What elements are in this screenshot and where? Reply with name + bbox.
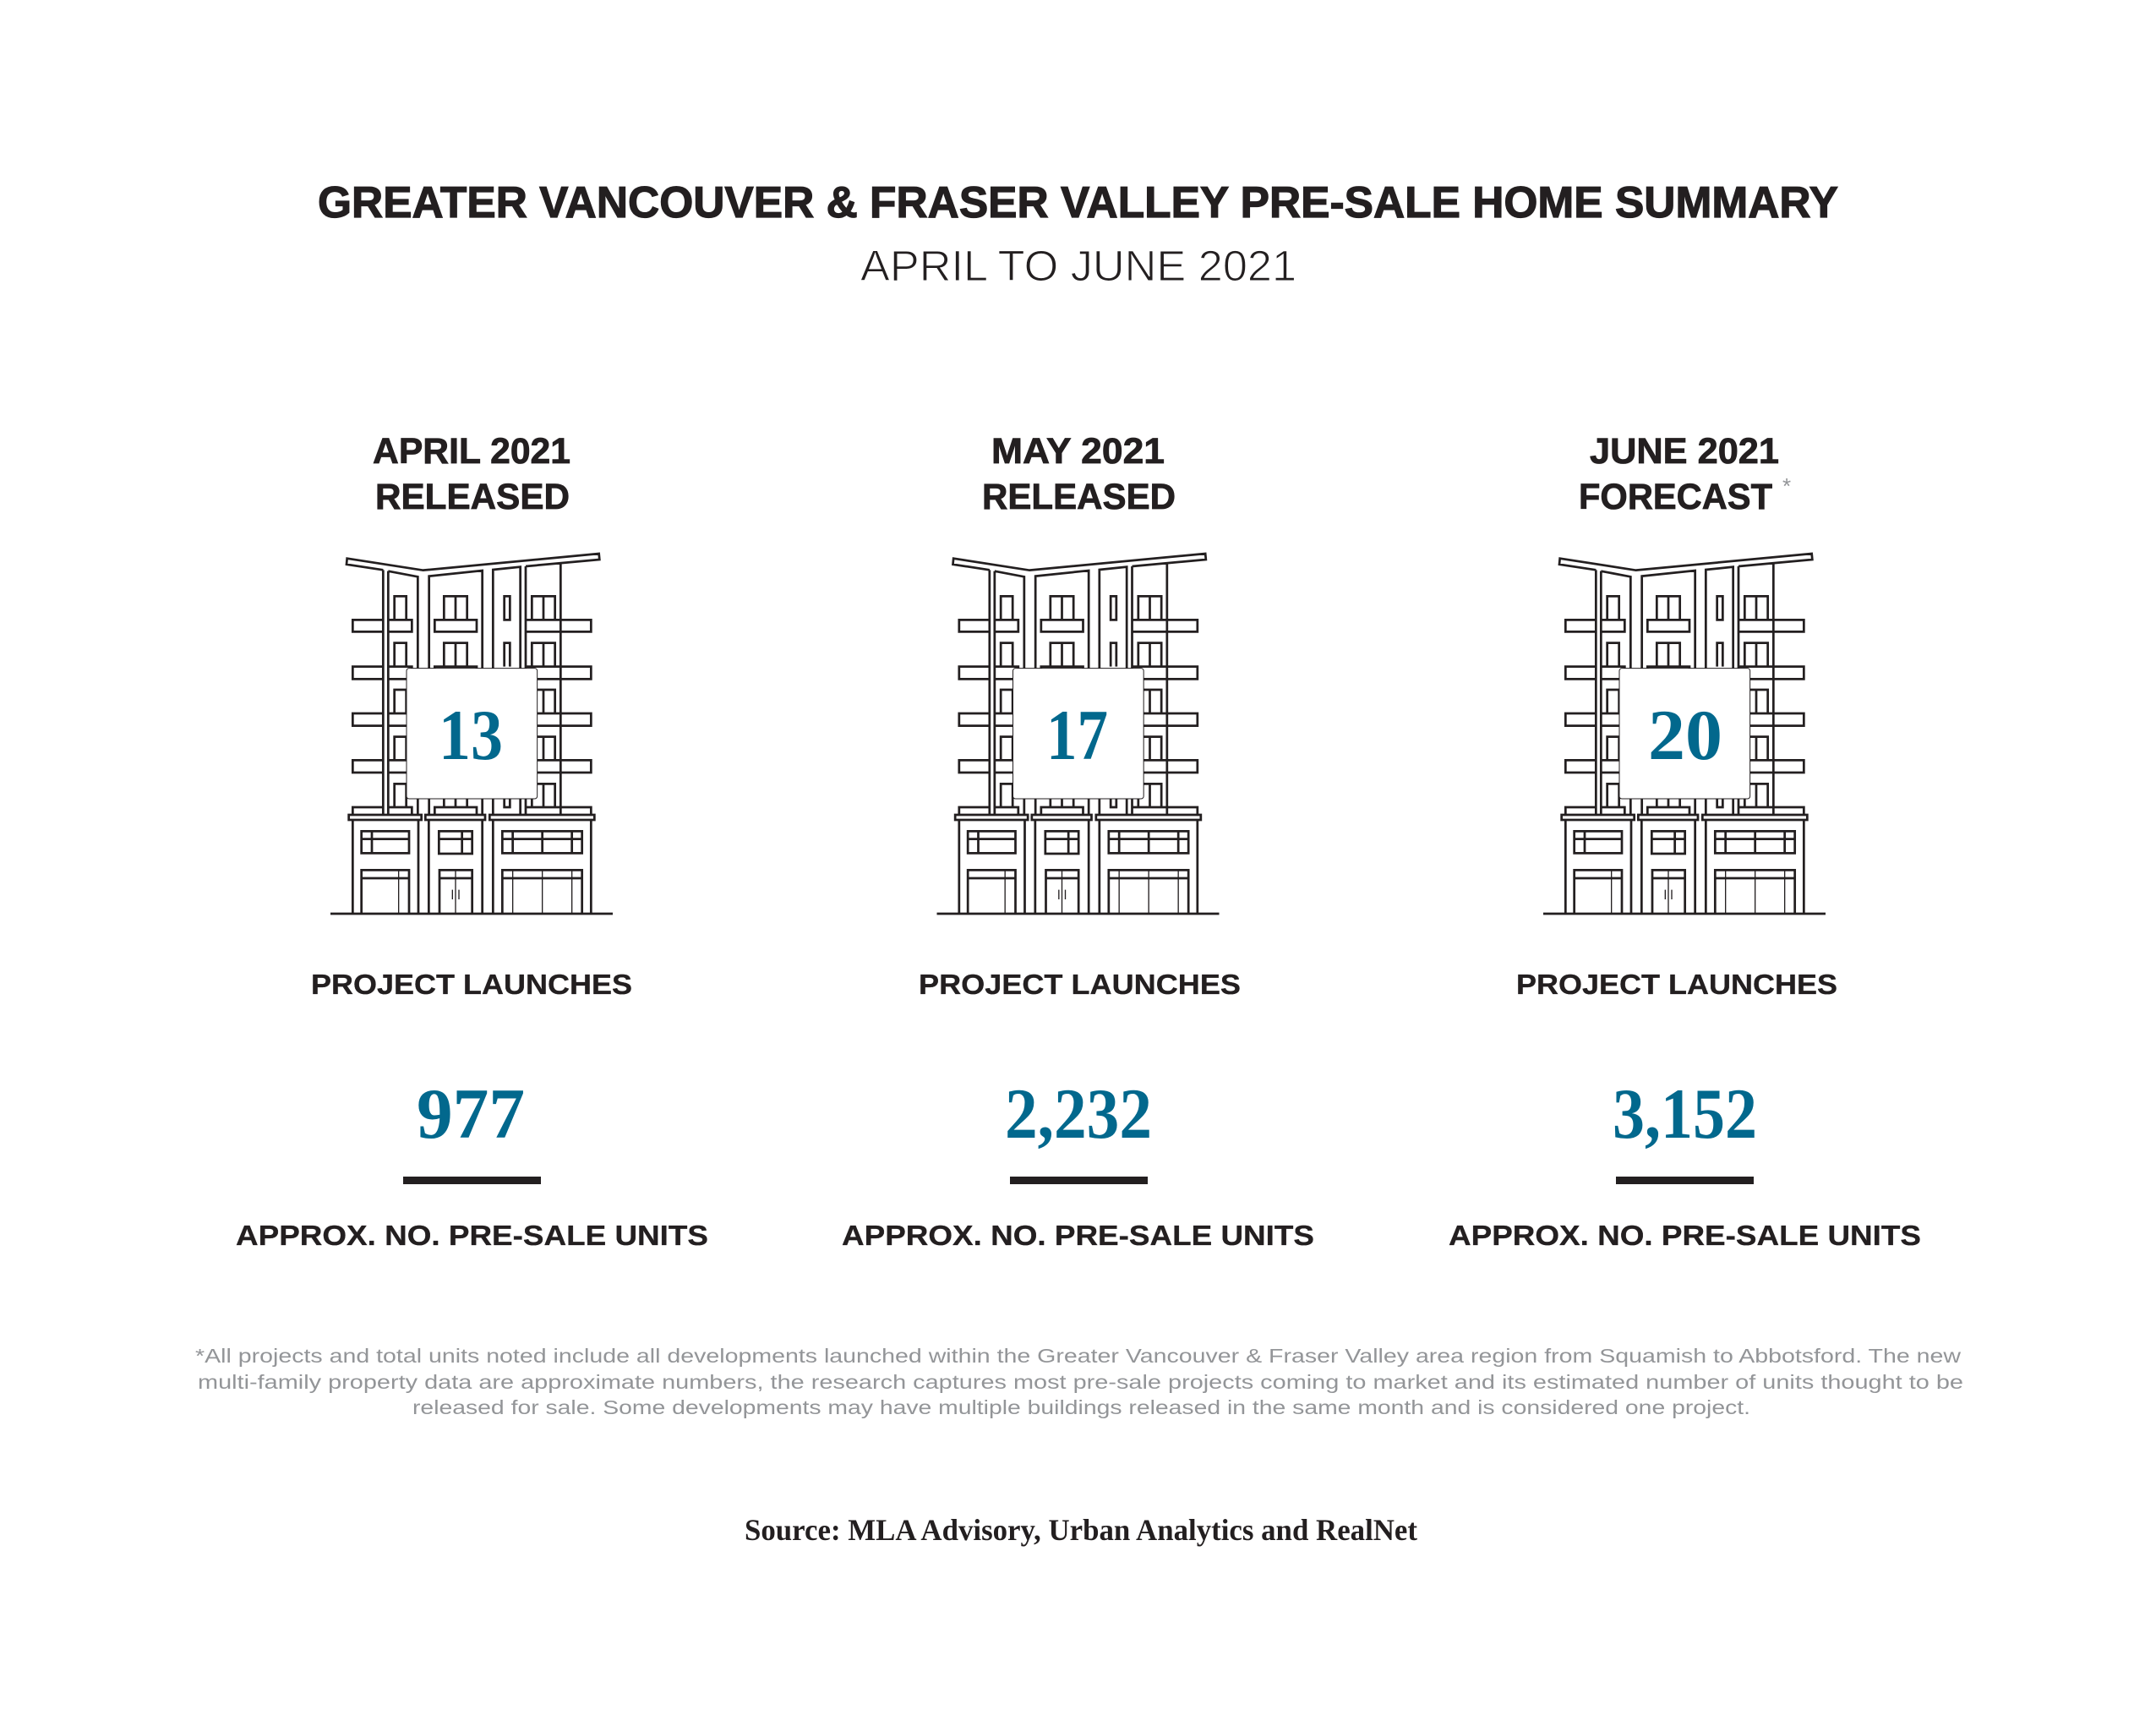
icon: building with project count 20: 20 [1648, 696, 1722, 775]
label: approx pre-sale units: APPROX. NO. PRE-SALE UNITS [236, 1220, 708, 1251]
label: approx pre-sale units: APPROX. NO. PRE-SALE UNITS [1449, 1220, 1921, 1251]
value: 2,232 units: 2,232 [1005, 1074, 1152, 1154]
heading: June 2021 forecast: * [1782, 473, 1791, 499]
heading: June 2021 forecast [1579, 431, 1791, 517]
subtitle: APRIL TO JUNE 2021 [860, 242, 1296, 290]
icon: building with project count 20 [1543, 554, 1826, 914]
heading: April 2021 released [373, 431, 570, 517]
panel: April 2021 [236, 431, 708, 1251]
source line: Source: MLA Advisory, Urban Analytics and RealNet [745, 1513, 1417, 1547]
heading: May 2021 released: RELEASED [982, 477, 1176, 517]
heading: June 2021 forecast: JUNE 2021 [1590, 431, 1779, 472]
divider bar [1616, 1177, 1754, 1184]
footnote: released for sale. Some developments may have multiple buildings released in the same month and is considered one project. [412, 1396, 1750, 1418]
icon: building with project count 13: 13 [439, 696, 503, 775]
heading: May 2021 released [982, 431, 1176, 517]
icon: building with project count 17: 17 [1046, 696, 1108, 775]
title: GREATER VANCOUVER & FRASER VALLEY PRE-SALE HOME SUMMARY [318, 178, 1838, 227]
panel: May 2021 [842, 431, 1314, 1251]
heading: April 2021 released: APRIL 2021 [373, 431, 570, 472]
divider bar [1010, 1177, 1148, 1184]
label: approx pre-sale units: APPROX. NO. PRE-SALE UNITS [842, 1220, 1314, 1251]
footnote: *All projects and total units noted include all developments launched within the Greater Vancouver & Fraser Valley area region from Squamish to Abbotsford. The new [195, 1345, 1961, 1367]
label: project launches: PROJECT LAUNCHES [919, 969, 1241, 1000]
heading: April 2021 released: RELEASED [375, 477, 570, 517]
footnote: multi-family property data are approximate numbers, the research captures most pre-sale projects coming to market and its estimated number of units thought to be [198, 1371, 1963, 1393]
value: 977 units: 977 [417, 1074, 525, 1154]
label: project launches: PROJECT LAUNCHES [311, 969, 632, 1000]
divider bar [403, 1177, 541, 1184]
heading: May 2021 released: MAY 2021 [991, 431, 1165, 472]
icon: building with project count 13 [330, 554, 613, 914]
heading: June 2021 forecast: FORECAST [1579, 477, 1772, 517]
panel: June 2021 [1449, 431, 1921, 1251]
value: 3,152 units: 3,152 [1613, 1074, 1757, 1154]
icon: building with project count 17 [936, 554, 1219, 914]
footnote [195, 1345, 1963, 1418]
label: project launches: PROJECT LAUNCHES [1516, 969, 1837, 1000]
